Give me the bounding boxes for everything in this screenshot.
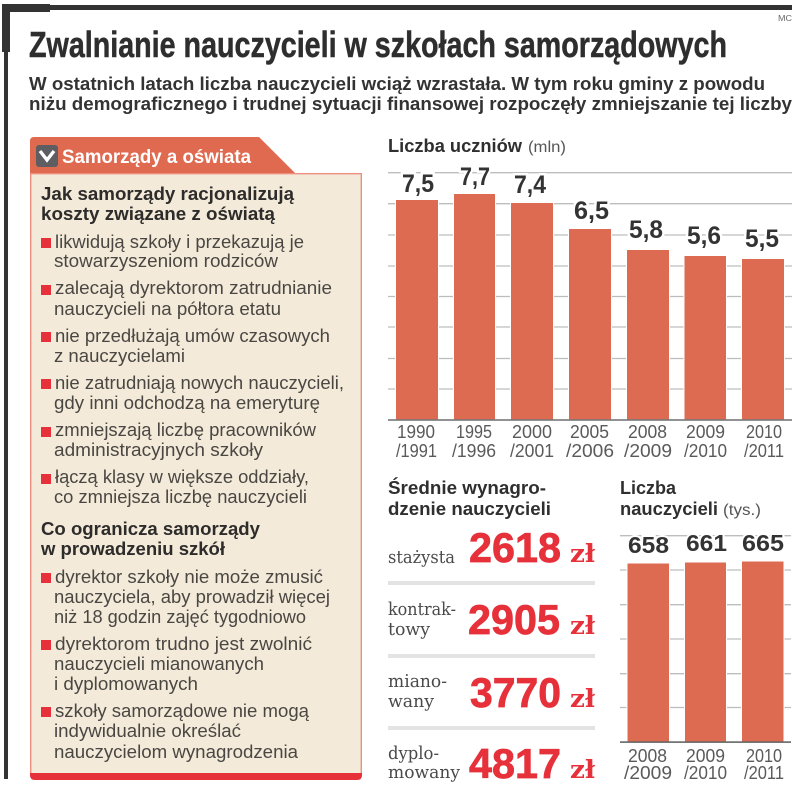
salary row: mianowany: 3770 [470,669,561,716]
section heading: racjonalizacja: koszty związane z oświatą [41,203,276,224]
list: ograniczenia: i dyplomowanych [54,674,198,694]
year labels: /2011 [744,763,784,783]
year labels: 2010 [746,422,782,442]
salary row: kontraktowy: 2905 [468,596,560,643]
list: racjonalizacja kosztów: likwidują szkoły i przekazują je [55,232,304,252]
year labels: 2000 [512,422,552,442]
salary row: mianowany: miano- [388,671,447,692]
list: ograniczenia: nauczycieli mianowanych [54,654,264,674]
chart heading: nauczycieli [620,498,718,519]
chart heading: Liczba uczniów [388,135,523,156]
chart: Liczba uczniów [388,135,792,461]
list: ograniczenia [41,567,330,762]
year labels: /2009 [624,763,672,783]
value labels: 5,8 [629,216,663,244]
list: racjonalizacja kosztów: stowarzyszeniom rodziców [54,251,279,271]
list: ograniczenia: dyrektor szkoły nie może zmusić [55,567,323,587]
salary heading [388,477,551,519]
salary row: dyplomowany: dyplo- [388,743,439,764]
subtitle: niżu demograficznego i trudnej sytuacji finansowej rozpoczęły zmniejszanie tej liczby [29,94,792,114]
salary row: stażysta: stażysta [388,547,455,568]
value labels: 661 [686,530,727,556]
salary row: stażysta: zł [570,539,595,568]
salary row: kontraktowy [388,596,595,643]
salary row: dyplomowany: mowany [388,762,461,783]
panel header tab [30,137,295,173]
year labels: 2005 [570,422,609,442]
list: racjonalizacja kosztów: łączą klasy w większe oddziały, [55,467,309,487]
salary heading: Średnie wynagro- [388,477,546,498]
panel heading: Samorządy a oświata [62,146,251,168]
value labels: 5,5 [745,225,779,253]
chart heading: (tys.) [723,502,761,519]
list: racjonalizacja kosztów: zmniejszają liczbę pracowników [55,420,317,440]
value labels: 5,6 [687,222,721,250]
list: ograniczenia: nauczycielom wynagrodzenia [54,742,299,762]
list: racjonalizacja kosztów: nauczycieli na półtora etatu [54,299,281,319]
value labels: 658 [628,532,669,558]
year labels: /2009 [624,441,672,461]
list: racjonalizacja kosztów: administracyjnych szkoły [54,440,263,460]
panel: Samorządy a oświata [30,137,362,780]
list: racjonalizacja kosztów: z nauczycielami [54,346,185,366]
year labels: 2009 [686,422,725,442]
list: ograniczenia: indywidualnie określać [54,721,241,741]
salary row: kontraktowy: towy [388,619,431,640]
salary heading: dzenie nauczycieli [388,498,551,519]
panel bottom band [30,773,362,780]
list: racjonalizacja kosztów: nie przedłużają umów czasowych [55,326,330,346]
section heading: ograniczenia: Co ogranicza samorządy [41,518,261,539]
list: ograniczenia: niż 18 godzin zajęć tygodniowo [54,607,306,627]
value labels: 6,5 [574,197,609,225]
year labels: 2009 [686,746,725,766]
salary row: mianowany [388,669,595,716]
year labels [624,746,784,783]
year labels: 2008 [628,422,667,442]
list: ograniczenia: nauczyciela, aby prowadził więcej [54,587,330,607]
section heading: racjonalizacja [41,183,295,224]
list: racjonalizacja kosztów [41,232,344,507]
chart: Liczba nauczycieli [620,477,791,783]
value labels [628,530,784,558]
salary row: kontraktowy: kontrak- [388,599,456,620]
year labels: /2010 [684,441,727,461]
subtitle [29,74,792,114]
salary row: dyplomowany [388,740,595,787]
value labels [402,163,779,253]
chart heading [620,477,761,519]
subtitle: W ostatnich latach liczba nauczycieli wciąż wzrastała. W tym roku gminy z powodu [29,74,765,94]
year labels: /2011 [744,441,784,461]
salary row: kontraktowy: zł [570,611,595,640]
year labels: /2010 [684,763,727,783]
bars [628,562,784,742]
list: racjonalizacja kosztów: gdy inni odchodzą na emeryturę [54,393,320,413]
year labels: 2010 [746,746,782,766]
year labels: 1995 [456,422,492,442]
list: racjonalizacja kosztów: nie zatrudniają nowych nauczycieli, [55,373,344,393]
salary row: mianowany: zł [570,684,595,713]
section heading: racjonalizacja: Jak samorządy racjonalizują [41,183,295,204]
year labels: 1990 [397,422,435,442]
value labels: 7,4 [514,171,546,199]
chart heading: Liczba [620,477,677,498]
bars [396,194,784,420]
value labels: 7,5 [402,170,434,198]
year labels: /2001 [510,441,554,461]
year labels: /1991 [396,441,437,461]
year labels: 2008 [628,746,667,766]
panel body [31,174,361,779]
year labels: /1996 [452,441,496,461]
salary row: dyplomowany: zł [570,755,595,784]
list: racjonalizacja kosztów: zalecają dyrektorom zatrudnianie [55,278,332,298]
year labels: /2006 [566,441,614,461]
value labels: 7,7 [460,163,490,191]
panel: Średnie wynagrodzenie nauczycieli [388,477,595,787]
section heading: ograniczenia [40,518,261,559]
year labels [396,422,784,461]
salary row: mianowany: wany [388,691,435,712]
value labels: 665 [742,530,784,556]
credit: MC [778,14,792,23]
list: racjonalizacja kosztów: co zmniejsza liczbę nauczycieli [54,487,307,507]
list: ograniczenia: szkoły samorządowe nie mogą [55,701,310,721]
icon: chevron [36,145,58,167]
salary row: stażysta: 2618 [469,524,561,571]
list: ograniczenia: dyrektorom trudno jest zwolnić [55,634,312,654]
salary row: stażysta [388,524,595,571]
salary row: dyplomowany: 4817 [469,740,561,787]
chart heading: (mln) [528,139,566,156]
section heading: ograniczenia: w prowadzeniu szkół [40,538,225,559]
